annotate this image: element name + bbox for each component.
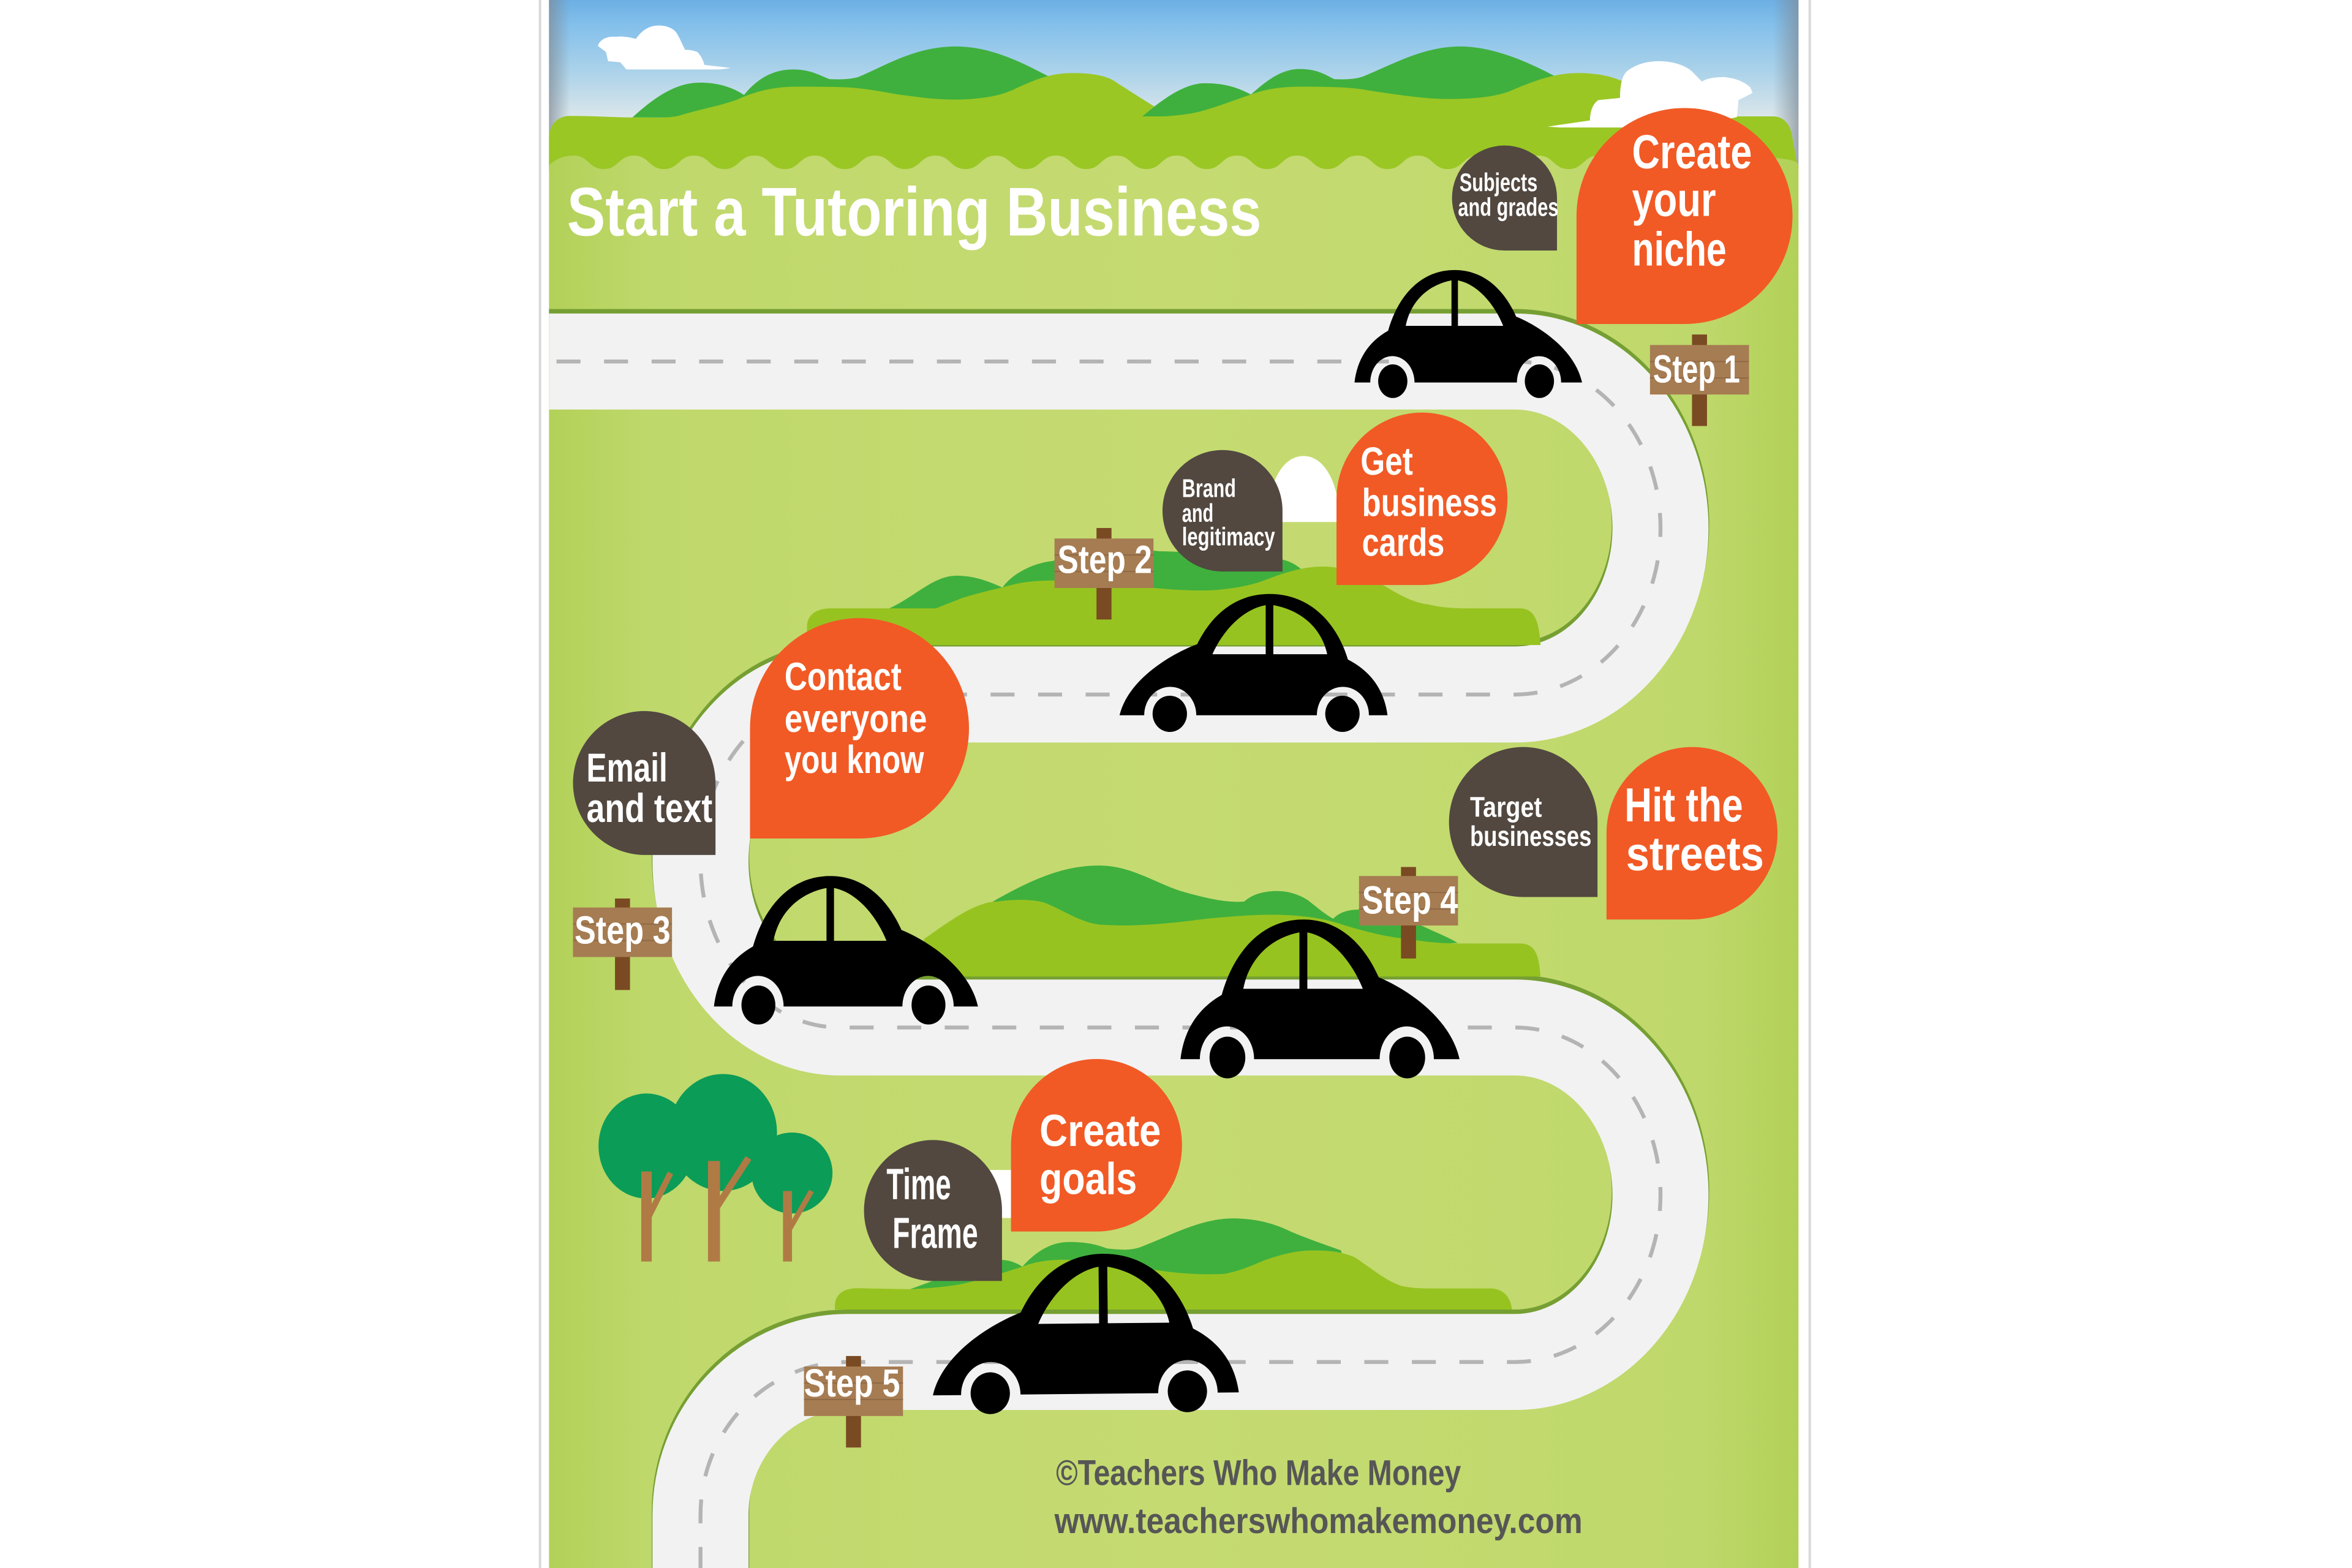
bubble: Create your niche: [1577, 108, 1793, 324]
sign: Step 1: Step 1: [1653, 347, 1740, 391]
website line: www.teacherswhomakemoney.com: [1054, 1501, 1583, 1541]
bubble: Get business cards: Get: [1360, 440, 1413, 483]
sign: Step 4: Step 4: [1362, 878, 1458, 922]
bubble: Email and text: Email: [587, 745, 668, 791]
bubble: Subjects and grades: Subjects: [1460, 168, 1537, 197]
cloud, upper right: [1548, 61, 1752, 127]
bubble: Hit the streets: [1607, 747, 1777, 919]
bubble: Create your niche: Create: [1632, 124, 1752, 178]
bubble: Contact everyone you know: Contact: [785, 655, 902, 699]
sign: Step 2: [1055, 528, 1153, 619]
sky: [549, 0, 1798, 168]
bubble: Brand and legitimacy: and: [1182, 499, 1213, 527]
sign: Step 2: Step 2: [1058, 538, 1152, 582]
trees: [598, 1074, 832, 1262]
light grass field with scalloped top: [549, 156, 1798, 1568]
bubble: Create goals: goals: [1039, 1153, 1137, 1204]
sign: Step 1: [1650, 334, 1749, 426]
title: Start a Tutoring Business: [567, 173, 1262, 250]
hills behind road, fourth lane: [835, 1218, 1512, 1310]
bubble: Contact everyone you know: everyone: [785, 697, 927, 741]
bubble: Target businesses: businesses: [1470, 820, 1591, 852]
bubble: Time Frame: Time: [886, 1161, 951, 1209]
bubble: Target businesses: Target: [1470, 791, 1542, 823]
sign: Step 5: Step 5: [804, 1362, 900, 1405]
winding road: [549, 358, 1660, 1568]
tree 2: [669, 1074, 777, 1262]
bubble: Time Frame: [864, 1140, 1002, 1281]
front hills and dark grass: [549, 73, 1798, 171]
car 5: [932, 1253, 1239, 1415]
credit line: ©Teachers Who Make Money: [1056, 1453, 1461, 1493]
car 4: [1180, 919, 1460, 1079]
cloud, upper left: [598, 26, 731, 69]
bubble: Create goals: Create: [1039, 1105, 1161, 1156]
bubble: Contact everyone you know: [750, 618, 969, 839]
bubble: Hit the streets: streets: [1626, 826, 1764, 880]
bubble: Create your niche: niche: [1632, 222, 1727, 276]
sign: Step 3: [573, 899, 672, 990]
bubble: Create your niche: your: [1632, 173, 1716, 227]
hills behind road, second lane: [807, 548, 1540, 645]
back mountains: [632, 47, 1635, 120]
bubble: Subjects and grades: [1452, 146, 1558, 251]
bubble: Target businesses: [1449, 747, 1597, 897]
cloud behind step 2 bubbles: [1267, 456, 1340, 522]
bubble: Subjects and grades: and grades: [1458, 193, 1558, 222]
bubble: Hit the streets: Hit the: [1624, 778, 1743, 832]
tree 1: [598, 1093, 695, 1262]
car 2: [1120, 594, 1387, 732]
sign: Step 3: Step 3: [575, 908, 671, 952]
sign: Step 4: [1359, 867, 1458, 959]
bubble: Email and text: and text: [587, 786, 712, 831]
bubble: Brand and legitimacy: legitimacy: [1182, 522, 1275, 551]
hills behind road, third lane: [924, 865, 1540, 976]
car 3: [714, 876, 978, 1025]
bubble: Contact everyone you know: you know: [785, 738, 924, 782]
bubble: Brand and legitimacy: Brand: [1182, 473, 1236, 502]
bubble: Create goals: [1011, 1059, 1182, 1232]
tree 3: [752, 1133, 832, 1262]
bubble: Email and text: [573, 711, 715, 855]
car 1: [1354, 270, 1582, 398]
cloud behind step 5 bubbles: [990, 1170, 1014, 1218]
bubble: Time Frame: Frame: [892, 1210, 978, 1258]
bubble: Get business cards: [1336, 413, 1507, 585]
sign: Step 5: [804, 1356, 903, 1447]
bubble: Get business cards: cards: [1362, 521, 1444, 564]
bubble: Brand and legitimacy: [1163, 450, 1283, 571]
page frame lines: [540, 0, 1810, 1568]
bubble: Get business cards: business: [1362, 481, 1497, 524]
